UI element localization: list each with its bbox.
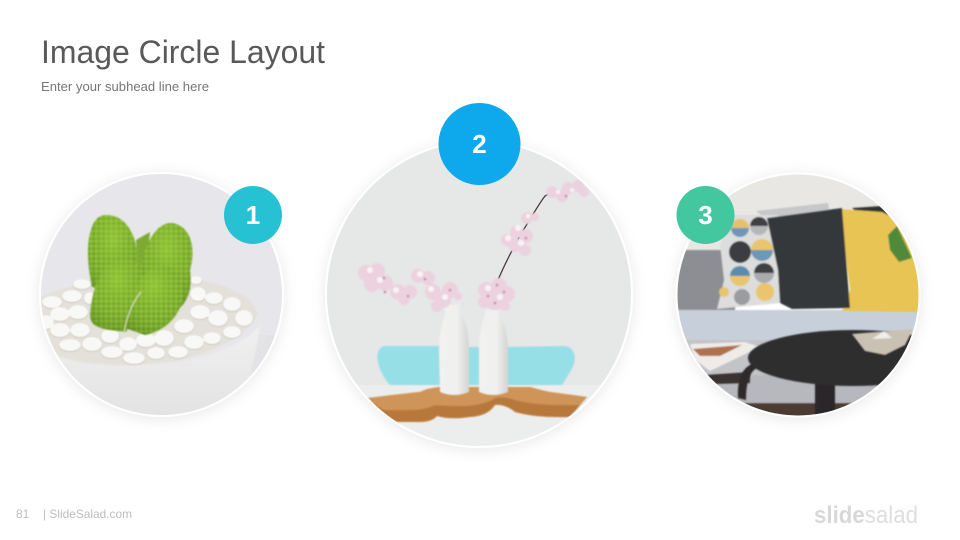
- image circle 2: vases: [325, 140, 635, 455]
- vases: [439, 302, 508, 395]
- wooden board: [368, 387, 587, 422]
- footer source: | SlideSalad.com: [43, 507, 132, 521]
- chairs: [377, 346, 575, 385]
- cactus: [88, 215, 193, 335]
- badge 2: 2: [472, 129, 487, 159]
- badge 1: 1: [246, 200, 260, 230]
- coffee table: [736, 329, 912, 414]
- geometric bowl: [852, 329, 913, 355]
- pot: [38, 277, 260, 420]
- logo: slidesalad: [814, 502, 918, 529]
- pillows: [717, 203, 921, 312]
- subhead: Enter your subhead line here: [41, 79, 209, 94]
- badge 3: [676, 186, 734, 244]
- badge 1: [224, 186, 282, 244]
- title: Image Circle Layout: [41, 34, 325, 70]
- sofa: [675, 250, 921, 418]
- branches: [498, 194, 548, 280]
- image circle 3: sofa: [674, 174, 922, 422]
- image circle 1: cactus: [38, 170, 290, 420]
- page number: 81: [16, 507, 30, 521]
- gravel: [38, 276, 253, 364]
- badge 3: 3: [698, 200, 713, 230]
- magazine: [690, 342, 760, 384]
- blossoms: [358, 180, 589, 312]
- badge 2: [438, 103, 520, 185]
